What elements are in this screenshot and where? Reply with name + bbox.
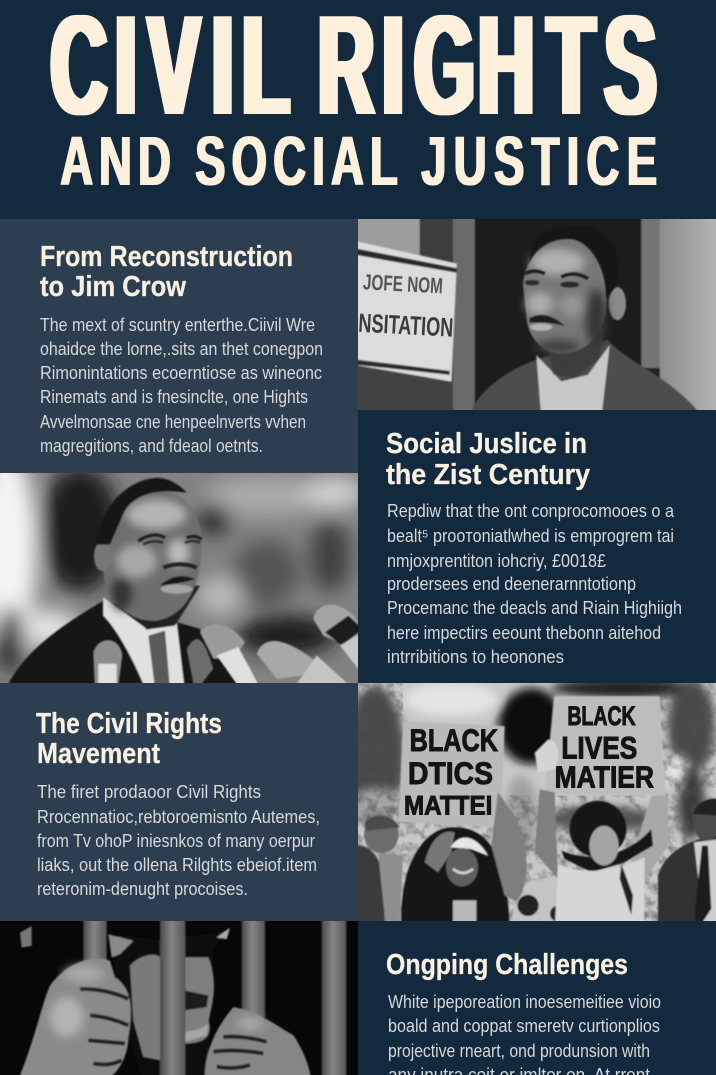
body text: social justice: Reрdiw that the ont conprocomooes o a <box>387 501 675 521</box>
heading: social justice: Social Juslice in <box>386 428 587 460</box>
heading: from reconstruction to jim crow <box>40 241 293 303</box>
body text: from reconstruction to jim crow: Rimonintations ecoerntiose as wineonc <box>40 363 322 383</box>
body text: civil rights movement: reteronim-denught procoises. <box>37 879 248 899</box>
body text: social justice: nmjoxprentiton iohcriy, £0018£ <box>387 551 606 571</box>
body text: civil rights movement: liaks, out the ollena Rilghts ebeiof.item <box>37 855 317 875</box>
header panel with title <box>0 0 716 219</box>
body text: social justice: intrribitions to heonones <box>387 647 564 667</box>
photo: black lives matter protest: DTICS <box>408 755 493 791</box>
body text: civil rights movement: from Tv ohoP iniesnkos of many oerpur <box>37 831 315 851</box>
body text: social justice: bealt⁵ prooтoniatlwhed is emprogrem tai <box>387 526 674 546</box>
body text: civil rights movement: The firet prodaoor Civil Rights <box>37 782 261 802</box>
photo: man beside a sign <box>358 219 716 410</box>
body text: from reconstruction to jim crow <box>40 315 323 456</box>
heading: civil rights movement <box>36 708 222 770</box>
photo: black lives matter protest: MATTEI <box>404 790 492 820</box>
body text: social justice: here impectirs eeount thebonn aitehod <box>387 623 661 643</box>
body text: from reconstruction to jim crow: Rinemats and is fnesinclte, one Hights <box>40 387 308 407</box>
body text: from reconstruction to jim crow: magregitions, and fdeaol oetnts. <box>40 436 263 456</box>
photo: hands gripping prison bars <box>0 921 358 1075</box>
photo: black lives matter protest: MATIER <box>555 761 654 795</box>
body text: ongoing challenges: boald and coppat smeretv curtionplios <box>388 1016 660 1036</box>
heading: social justice <box>386 428 590 491</box>
photo: black lives matter protest: LIVES <box>561 730 637 766</box>
photo: black lives matter protest <box>358 683 716 921</box>
heading: ongoing challenges: Ongping Challenges <box>386 949 628 981</box>
panel: the civil rights movement <box>0 683 358 921</box>
panel: ongoing challenges <box>358 921 716 1075</box>
heading: from reconstruction to jim crow: From Reconstruction <box>40 241 293 273</box>
body text: ongoing challenges <box>388 992 661 1075</box>
heading: social justice: the Zist Century <box>386 459 590 491</box>
body text: social justice <box>387 501 682 667</box>
body text: ongoing challenges: projective rneart, ond produnsion with <box>388 1041 650 1061</box>
body text: social justice: Procemanc the deacls and Riain Highiigh <box>387 598 682 618</box>
photo: black lives matter protest: BLACK <box>567 700 636 731</box>
panel: social justice in the 21st century <box>358 410 716 683</box>
body text: social justice: prodersees end deenerarnntotionp <box>387 574 636 594</box>
photo: man beside a sign: NSITATION <box>358 308 454 343</box>
body text: from reconstruction to jim crow: Avvelmonsae cne henpeelnverts vvhen <box>40 412 306 432</box>
body text: from reconstruction to jim crow: The mext of scuntry enterthe.Ciivil Wre <box>40 315 315 335</box>
photo: black lives matter protest: BLACK <box>410 722 498 758</box>
heading: civil rights movement: The Civil Rights <box>36 708 222 740</box>
heading: from reconstruction to jim crow: to Jim Crow <box>40 271 186 303</box>
subtitle: and social justice: AND SOCIAL JUSTICE <box>60 122 657 200</box>
photo: speaker at microphones <box>0 473 358 683</box>
body text: civil rights movement <box>37 782 320 899</box>
photo: man beside a sign: JOFE NOM <box>362 269 444 298</box>
body text: civil rights movement: Rrocennatioc,rebtoroemisnto Autemes, <box>37 807 320 827</box>
body text: ongoing challenges: White ipeporeation inoesemeitiee vioio <box>388 992 661 1012</box>
body text: from reconstruction to jim crow: ohaidce the lorne,.sits an thet conegpon <box>40 339 323 359</box>
panel: from reconstruction to jim crow <box>0 219 358 473</box>
heading: civil rights movement: Mavement <box>37 738 160 770</box>
